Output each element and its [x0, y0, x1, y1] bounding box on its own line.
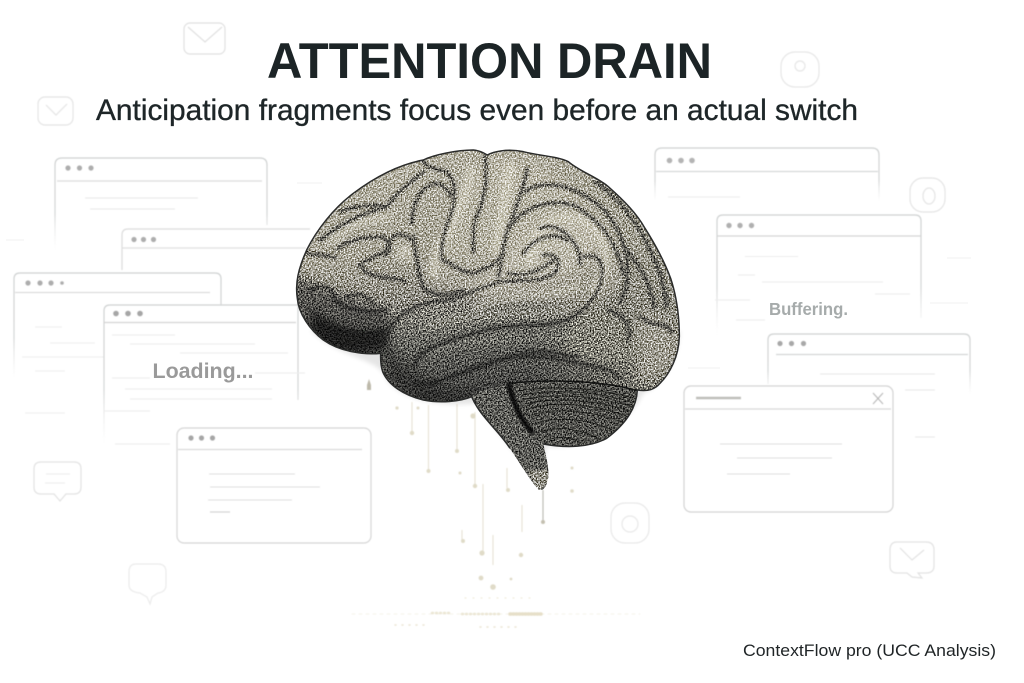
browser window: loading — [104, 305, 305, 445]
browser window: buffering — [715, 215, 921, 335]
gyri highlights — [333, 167, 606, 353]
sulci lines — [307, 157, 672, 385]
title: ATTENTION DRAIN — [267, 33, 712, 89]
icon: round badge top right — [781, 52, 819, 87]
label: loading: Loading... — [152, 360, 254, 383]
icon: mail bubble bottom right — [890, 542, 934, 578]
icon: chat bubble bottom left — [129, 564, 166, 604]
lobe shading — [290, 157, 678, 490]
stipple grain — [290, 140, 690, 500]
browser window: second left — [122, 229, 310, 270]
browser window: lower right — [768, 334, 970, 437]
icon: round badge bottom — [611, 503, 649, 543]
browser window: front with close icon — [684, 386, 893, 512]
drips and dust below the brain — [352, 379, 640, 627]
subtitle: Anticipation fragments focus even before an actual switch — [96, 94, 858, 127]
browser window: top right — [655, 148, 879, 202]
browser window: third left — [14, 273, 221, 413]
source credit: ContextFlow pro (UCC Analysis) — [743, 641, 996, 660]
icon: chat bubble left — [34, 462, 81, 501]
icon: round badge right — [910, 178, 945, 212]
sulci shadows — [307, 157, 672, 385]
stray marks — [6, 183, 971, 368]
brain outline — [297, 150, 679, 448]
brain body — [290, 140, 690, 500]
brain soft shadow — [310, 330, 680, 480]
brain illustration — [290, 140, 690, 500]
browser window: top left — [55, 158, 267, 250]
cerebellum — [472, 381, 637, 490]
browser window: bottom left — [177, 428, 371, 543]
icon: envelope left — [38, 97, 73, 125]
icon: envelope top — [184, 23, 225, 54]
label: buffering: Buffering. — [769, 299, 848, 319]
